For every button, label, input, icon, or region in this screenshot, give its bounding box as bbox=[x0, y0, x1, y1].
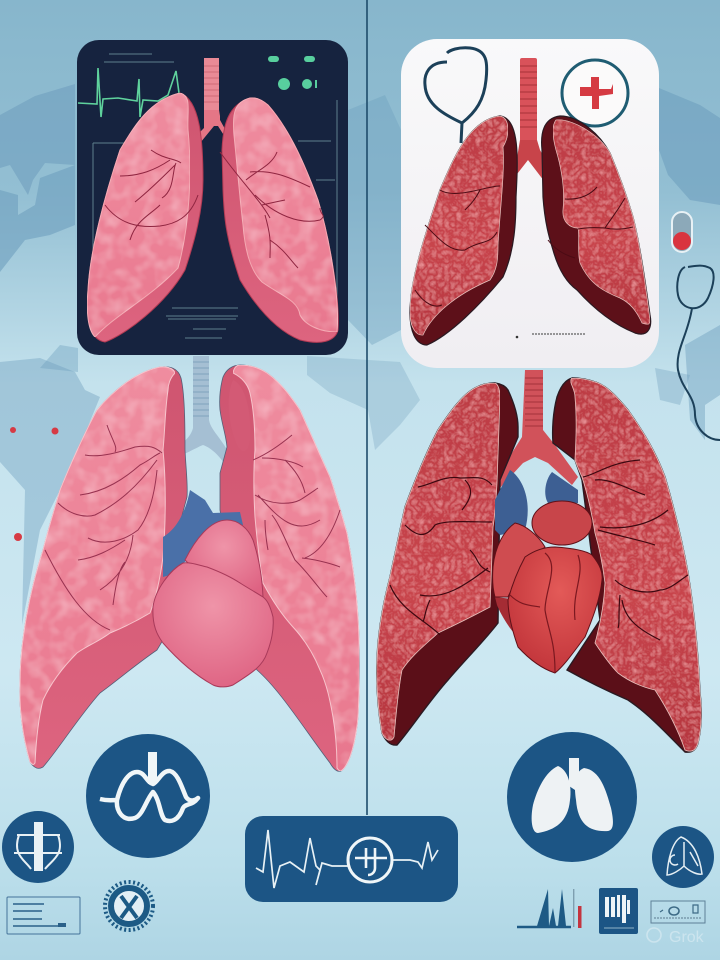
caption marks bbox=[516, 334, 586, 338]
left lung bbox=[20, 367, 187, 768]
ECG panel bbox=[245, 816, 458, 902]
medical cross badge bbox=[562, 60, 628, 126]
icon: lungs badge right bbox=[507, 732, 637, 862]
red dots bbox=[10, 427, 58, 541]
world map silhouette bbox=[0, 84, 720, 625]
left lung bbox=[87, 93, 203, 342]
icon: virus gear bbox=[105, 882, 153, 930]
healthy lungs large bbox=[20, 356, 359, 771]
icon: blue data square bbox=[599, 888, 638, 934]
icon: lungs mini badge bbox=[652, 826, 714, 888]
trachea blue bbox=[163, 356, 255, 497]
icon: lungs badge left bbox=[86, 734, 210, 858]
right lung bbox=[542, 116, 651, 334]
right lung bbox=[220, 98, 338, 342]
left lung bbox=[410, 116, 517, 345]
panel: monitor with healthy lungs bbox=[77, 40, 348, 355]
icon: thermometer pill bbox=[672, 212, 692, 252]
trachea bbox=[186, 58, 238, 152]
circle symbol bbox=[348, 838, 392, 882]
stethoscope bbox=[425, 48, 487, 143]
bar chart bbox=[517, 889, 582, 928]
heart bbox=[493, 501, 602, 673]
diseased lungs large bbox=[377, 370, 701, 752]
icon: gray data box bbox=[651, 901, 705, 923]
icon: heart cross badge bbox=[2, 811, 74, 883]
left lung bbox=[377, 383, 518, 745]
heart bbox=[153, 520, 273, 687]
ECG trace bbox=[78, 68, 179, 117]
watermark bbox=[647, 928, 705, 946]
watermark: Grok bbox=[669, 929, 705, 946]
divider line bbox=[366, 0, 368, 815]
trachea bbox=[497, 58, 560, 194]
panel: white card with diseased lungs bbox=[401, 39, 659, 368]
trachea red bbox=[496, 370, 578, 490]
vessels bbox=[163, 490, 243, 577]
icon: document box bbox=[7, 897, 80, 934]
status indicators bbox=[268, 56, 317, 90]
icon: stethoscope right bbox=[677, 266, 720, 440]
monitor readout lines bbox=[93, 54, 337, 338]
right lung bbox=[220, 365, 360, 771]
vessels bbox=[495, 470, 578, 535]
trace bbox=[256, 830, 438, 888]
right lung bbox=[553, 378, 701, 752]
